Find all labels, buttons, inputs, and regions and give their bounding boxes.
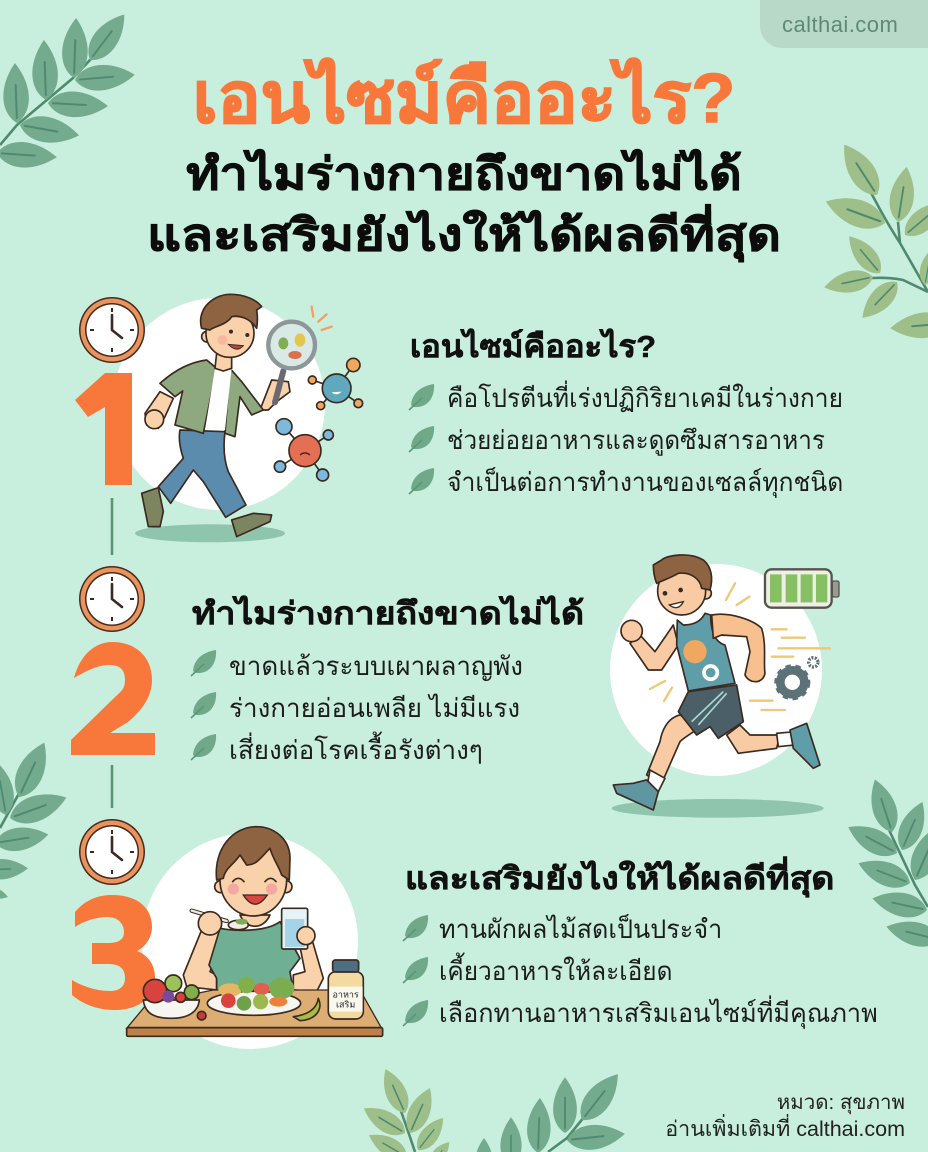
title: เอนไซม์คืออะไร? xyxy=(193,59,735,137)
section 3 bullet 2: เคี้ยวอาหารให้ละเอียด xyxy=(439,956,672,986)
watermark tab: calthai.com xyxy=(782,12,898,37)
section 2 heading: ทำไมร่างกายถึงขาดไม่ได้ xyxy=(192,596,584,631)
leaf cluster: mid left xyxy=(0,737,71,902)
section 1 heading: เอนไซม์คืออะไร? xyxy=(410,329,656,364)
leaf cluster: top left xyxy=(0,7,136,170)
section 3 bullet 3: เลือกทานอาหารเสริมเอนไซม์ที่มีคุณภาพ xyxy=(439,998,878,1028)
character 3 eating with table, food and supplement bottle: อาหาร xyxy=(333,989,359,999)
section 2 bullets: ขาดแล้วระบบเผาผลาญพัง xyxy=(229,651,523,681)
bullet leaves xyxy=(191,384,434,1026)
watermark tab xyxy=(760,0,928,48)
section 2 text xyxy=(192,595,584,765)
section 2 bullets xyxy=(229,651,523,765)
section 1 text xyxy=(410,328,843,498)
footer: หมวด: สุขภาพ xyxy=(777,1091,905,1114)
subtitle line 1: ทำไมร่างกายถึงขาดไม่ได้ xyxy=(186,150,742,199)
character 3 eating with table, food and supplement bottle: เสริม xyxy=(336,1000,355,1010)
leaf cluster: top right xyxy=(821,138,928,341)
white circles behind characters xyxy=(113,298,822,1049)
section 3 heading: และเสริมยังไงให้ได้ผลดีที่สุด xyxy=(405,861,834,896)
connector lines xyxy=(111,498,113,808)
section 1 bullet 2: ช่วยย่อยอาหารและดูดซึมสารอาหาร xyxy=(447,425,825,455)
leaf cluster: mid right xyxy=(843,776,928,951)
big numeral 1 xyxy=(75,373,132,485)
character 3 eating with table, food and supplement bottle xyxy=(127,827,383,1036)
footer xyxy=(665,1091,905,1141)
section 2 bullets: ร่างกายอ่อนเพลีย ไม่มีแรง xyxy=(229,693,520,723)
section 2 bullets: เสี่ยงต่อโรคเรื้อรังต่างๆ xyxy=(229,735,483,765)
big numeral 2 xyxy=(71,642,155,755)
leaf cluster: bottom xyxy=(359,1065,628,1152)
character 2 running with battery and gears xyxy=(612,555,839,818)
clock icons xyxy=(79,297,145,885)
footer: อ่านเพิ่มเติมที่ calthai.com xyxy=(665,1117,905,1141)
subtitle line 2: และเสริมยังไงให้ได้ผลดีที่สุด xyxy=(147,211,781,260)
section 3 text xyxy=(405,856,878,1029)
section 1 bullet 3: จำเป็นต่อการทำงานของเซลล์ทุกชนิด xyxy=(447,467,843,497)
section 3 bullet 1: ทานผักผลไม้สดเป็นประจำ xyxy=(439,914,722,944)
character 1 with magnifier and molecules xyxy=(135,294,363,542)
big numeral 3 xyxy=(72,895,155,1010)
section 1 bullet 1: คือโปรตีนที่เร่งปฏิกิริยาเคมีในร่างกาย xyxy=(447,383,843,413)
